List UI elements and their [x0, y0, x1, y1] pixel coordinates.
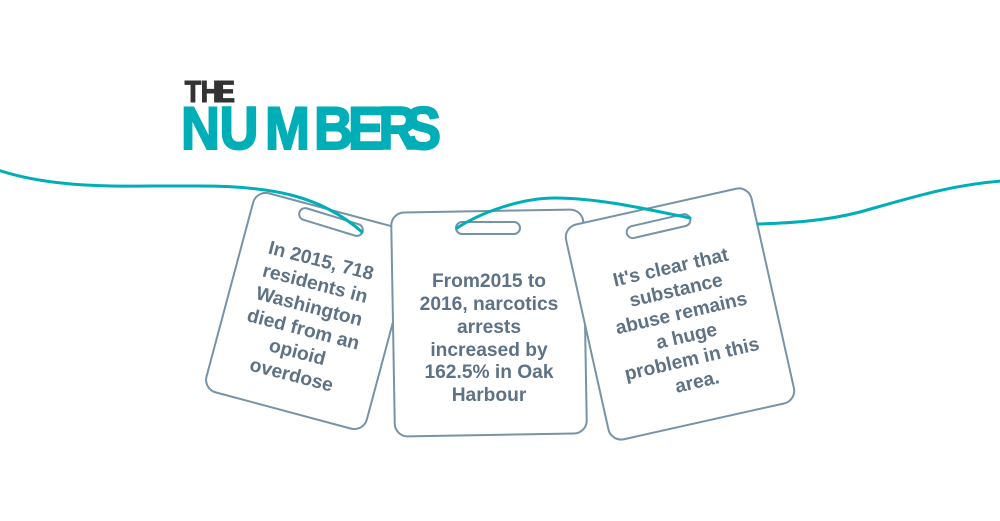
string: middle loop [457, 198, 690, 228]
text 3: a huge [654, 319, 720, 354]
text 2: 2016, narcotics [420, 294, 558, 315]
text 3: area. [673, 367, 721, 398]
text 1: residents in [260, 261, 370, 308]
tag card 3 [563, 186, 797, 442]
string: right segment [758, 181, 1000, 224]
text 1 [233, 237, 379, 400]
text 1: died from an [245, 305, 362, 355]
text 2: arrests [457, 317, 521, 338]
text 1: In 2015, 718 [266, 238, 376, 285]
text 1: overdose [247, 355, 336, 397]
text 2: increased by [430, 340, 548, 361]
slot 2 [456, 222, 520, 234]
text 3 [601, 242, 767, 408]
text 2: 162.5% in Oak [424, 362, 554, 383]
slot 1 [298, 207, 364, 237]
text 3: problem in this [623, 334, 761, 385]
tag card 2 [391, 209, 587, 437]
text 2 [420, 271, 558, 406]
string: left segment [0, 170, 362, 232]
text 2: Harbour [452, 385, 527, 406]
text 2: From2015 to [432, 271, 546, 292]
text 3: abuse remains [614, 288, 749, 339]
tag card 1 [203, 190, 417, 432]
text 1: opioid [267, 335, 328, 370]
slot 3 [625, 213, 692, 239]
title: THE [185, 75, 235, 109]
text 3: substance [628, 270, 725, 312]
text 3: It's clear that [611, 244, 731, 291]
title: NUMBERS [181, 95, 441, 163]
text 1: Washington [254, 283, 365, 331]
